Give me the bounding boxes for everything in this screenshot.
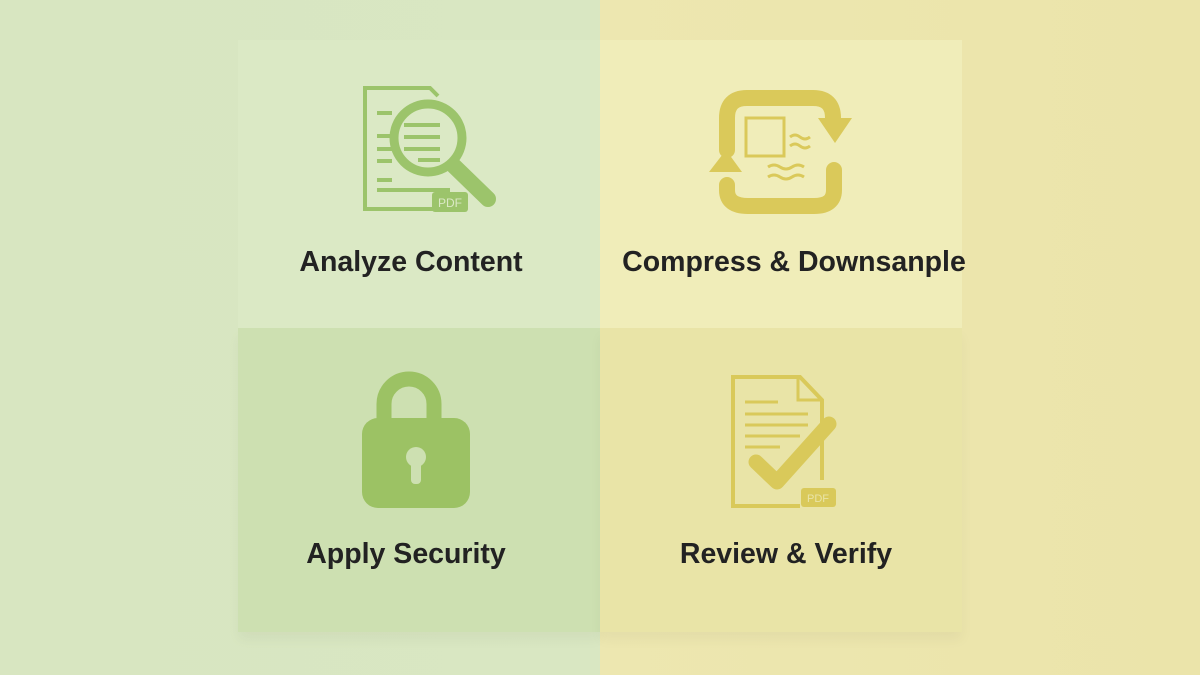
heading: Compress & Downsanple: Compress & Downsanple bbox=[622, 246, 966, 278]
heading: Analyze Content: Analyze Content bbox=[299, 246, 523, 278]
heading: Review & Verify: Review & Verify bbox=[680, 538, 892, 570]
heading: Apply Security: Apply Security bbox=[306, 538, 506, 570]
panel: review bbox=[600, 328, 962, 632]
panel: analyze bbox=[238, 40, 600, 328]
icon: document magnifier: PDF bbox=[438, 196, 462, 210]
panel: security bbox=[238, 328, 600, 632]
icon: document check: PDF bbox=[807, 493, 829, 505]
panel: compress bbox=[600, 40, 962, 328]
